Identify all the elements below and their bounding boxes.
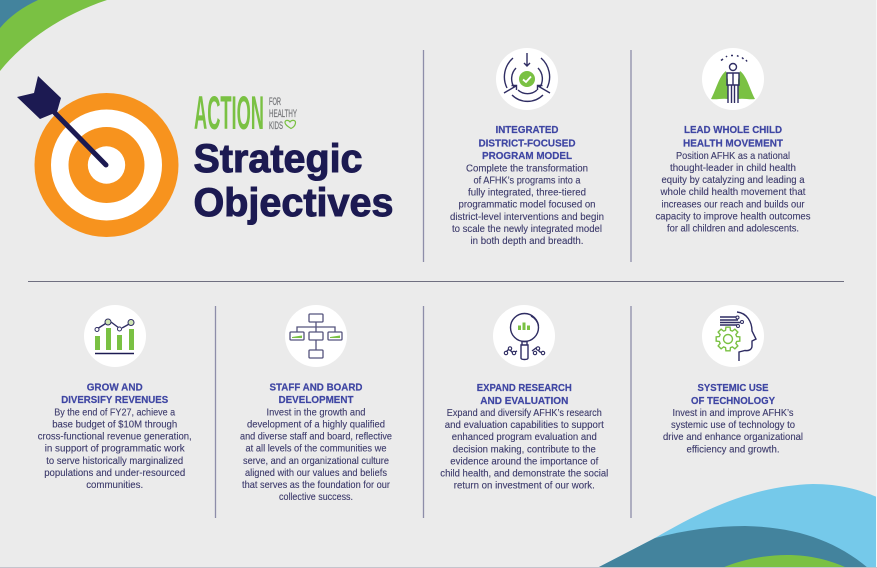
panel: staff and board development [240, 305, 392, 503]
body text: By the end of FY27, achieve a [54, 406, 175, 418]
body text: to scale the newly integrated model [452, 223, 602, 235]
body text: evidence around the importance of [450, 456, 598, 468]
body text: Complete the transformation [466, 162, 588, 174]
body text: populations and under-resourced [44, 467, 185, 479]
panel: expand research and evaluation [440, 305, 608, 492]
heading: AND EVALUATION [480, 395, 568, 407]
heading [683, 124, 784, 150]
body text: at all levels of the communities we [246, 442, 387, 454]
top-left corner swoosh [0, 0, 107, 71]
body text [38, 406, 192, 491]
body text: and evaluation capabilities to support [445, 419, 604, 431]
body text: base budget of $10M through [52, 418, 177, 430]
body text: of AFHK’s programs into a [474, 174, 581, 186]
logo: Action for Healthy Kids: ACTION [194, 86, 264, 139]
heading: HEALTH MOVEMENT [683, 138, 784, 150]
heading: OF TECHNOLOGY [691, 395, 775, 407]
body text: equity by catalyzing and leading a [662, 174, 805, 186]
body text: whole child health movement that [660, 186, 806, 198]
panel: systemic use of technology [663, 305, 803, 456]
body text: fully integrated, three-tiered [468, 186, 586, 198]
heading: SYSTEMIC USE [698, 382, 768, 394]
heading [270, 382, 363, 406]
body text: thought-leader in child health [670, 162, 796, 174]
body text: capacity to improve health outcomes [656, 210, 810, 222]
body text [240, 406, 392, 503]
body text: cross-functional revenue generation, [38, 430, 192, 442]
heading: DIVERSIFY REVENUES [61, 394, 168, 406]
panel: lead whole child health movement [656, 48, 810, 234]
body text: Invest in the growth and [266, 406, 366, 418]
body text: efficiency and growth. [686, 444, 780, 456]
heading: GROW AND [87, 382, 143, 394]
logo: Action for Healthy Kids: HEALTHY [269, 108, 297, 120]
column and row dividers [28, 50, 844, 518]
icon: bar and line chart [84, 305, 146, 367]
body text: in both depth and breadth. [470, 235, 584, 247]
body text: to serve historically marginalized [46, 455, 183, 467]
logo: Action for Healthy Kids: KIDS [269, 120, 283, 132]
body text: Invest in and improve AFHK’s [672, 407, 794, 419]
body text: systemic use of technology to [671, 419, 795, 431]
body text: communities. [86, 479, 143, 491]
body text: Position AFHK as a national [676, 150, 790, 162]
body text: and diverse staff and board, reflective [240, 430, 392, 442]
title: Strategic Objectives: Strategic [194, 137, 362, 181]
icon: caped leader [702, 48, 764, 110]
body text: decision making, contribute to the [453, 444, 596, 456]
body text: programmatic model focused on [458, 198, 596, 210]
heading: PROGRAM MODEL [482, 150, 573, 162]
target icon with arrow [17, 76, 178, 237]
body text: development of a highly qualified [247, 418, 385, 430]
body text: collective success. [279, 491, 353, 503]
body text: district-level interventions and begin [450, 211, 604, 223]
body text: Expand and diversify AFHK’s research [447, 407, 602, 419]
heading [61, 382, 168, 406]
icon: head with gear [702, 305, 764, 367]
body text: aligned with our values and beliefs [245, 467, 387, 479]
title: Strategic Objectives: Objectives [194, 181, 394, 225]
body text: for all children and adolescents. [667, 222, 799, 234]
body text [663, 407, 803, 456]
body text: in support of programmatic work [45, 442, 185, 454]
heading: LEAD WHOLE CHILD [684, 124, 782, 136]
icon: organization chart [285, 305, 347, 367]
body text: serve, and an organizational culture [243, 455, 389, 467]
heading: INTEGRATED [496, 124, 559, 136]
title: Strategic Objectives [194, 137, 394, 225]
body text [656, 150, 810, 234]
body text [450, 162, 604, 247]
heading: STAFF AND BOARD [270, 382, 363, 394]
logo: Action for Healthy Kids: FOR [269, 96, 281, 108]
body text [440, 407, 608, 492]
body text: increases our reach and builds our [662, 198, 805, 210]
body text: enhanced program evaluation and [452, 431, 597, 443]
heading: EXPAND RESEARCH [477, 382, 572, 394]
panel: integrated district-focused program model [450, 48, 604, 247]
body text: that serves as the foundation for our [242, 479, 390, 491]
heading: DEVELOPMENT [278, 394, 354, 406]
panel: grow and diversify revenues [38, 305, 192, 491]
body text: return on investment of our work. [454, 480, 595, 492]
heading [477, 382, 572, 407]
body text: child health, and demonstrate the social [440, 468, 608, 480]
bottom-right corner waves [597, 484, 877, 568]
body text: drive and enhance organizational [663, 431, 803, 443]
logo: Action for Healthy Kids [194, 86, 297, 139]
heading: DISTRICT-FOCUSED [478, 138, 576, 150]
icon: magnifying glass with chart [493, 305, 555, 367]
heading [691, 382, 775, 407]
heading [478, 124, 576, 162]
icon: cycle with check mark [496, 48, 558, 110]
